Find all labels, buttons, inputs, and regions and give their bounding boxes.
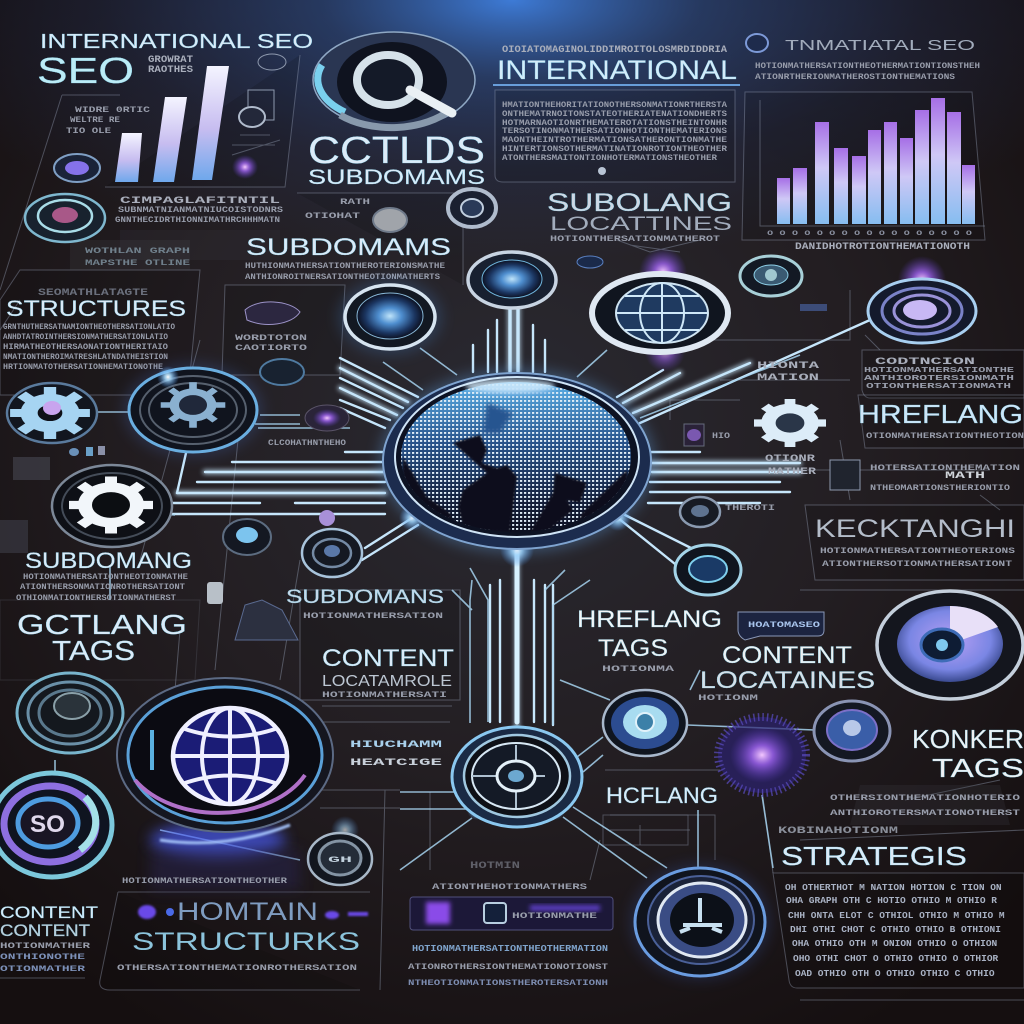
text block: heading lines: [38, 196, 283, 299]
node: small left: [223, 519, 271, 555]
gear node: left blue: [7, 383, 97, 443]
heading: gctlang tags: [17, 609, 187, 666]
central globe: [379, 369, 655, 553]
heading: hiuchamm: HEATCIGE: [350, 758, 442, 769]
heading: hreflang right: OTIONMATHERSATIONTHEOTION: [866, 432, 1024, 441]
heading: structures: NMATIONTHEROIMATRESHLATNDATHEISTION: [3, 353, 168, 362]
text block: right upper: HIONTA: [757, 361, 819, 372]
chip: hoatomaseo: HOATOMASEO: [748, 621, 820, 630]
text block: strategis: OH OTHERTHOT M NATION HOTION C TION ON: [785, 882, 1002, 893]
heading: international seo small: HOTIONMATHERSATIONTHEOTHERMATIONTIONSTHEH: [755, 62, 980, 71]
heading: hreflang right: MATHER: [768, 467, 816, 478]
text block: centre bottom: NTHEOTIONMATIONSTHEROTERSATIONH: [408, 979, 608, 988]
heading: content locataines: HOTIONM: [698, 694, 758, 703]
heading: gctlang tags: GCTLANG: [17, 609, 187, 640]
heading: hiuchamm: HIUCHAMM: [350, 740, 442, 751]
heading: subolang locattines: LOCATTINES: [550, 214, 732, 235]
text block: subdomams: WORDTOTON: [235, 334, 307, 343]
text block: domain structurks: STRUCTURKS: [132, 928, 360, 956]
text block: content left: ONTHIONOTHE: [0, 953, 85, 962]
text block: heading lines: GNNTHECIDRTHIONNIMATHRCHHHMATN: [115, 216, 280, 225]
heading: keck tanghi: HOTIONMATHERSATIONTHEOTERIONS: [820, 547, 1015, 556]
heading: hiuchamm: [350, 740, 442, 769]
small text center-right: THEROTI: [725, 504, 775, 513]
heading: subdomang: SUBDOMANG: [25, 548, 192, 573]
heading: subdomang: ATIONTHERSONMATIONROTHERSATIONT: [20, 583, 185, 592]
left traces: [172, 452, 385, 514]
node: bottom small left: [308, 816, 372, 885]
text block: centre bottom: HOTIONMATHERSATIONTHEOTHERMATION: [412, 943, 608, 954]
heading: keck tanghi: [815, 515, 1015, 569]
small text center-right: HIO: [712, 432, 730, 441]
heading: content locataines: CONTENT: [722, 642, 852, 669]
heading: international: ATONTHERSMAITONTIONHOTERMATIONSTHEOTHER: [502, 154, 717, 163]
heading: international: OIOIATOMAGINOLIDDIMROITOLOSMRDIDDRIA: [502, 45, 727, 56]
heading: structures: HRTIONMATOTHERSATIONHEMATIONOTHE: [3, 363, 163, 372]
text block: heading lines: CIMPAGLAFITNTIL: [120, 196, 280, 207]
heading: international: TERSOTINONMATHERSATIONHOTIONTHEMATERIONS: [502, 127, 727, 136]
heading: structures: STRUCTURES: [6, 296, 186, 321]
text block: subdomams: SUBDOMAMS: [246, 234, 451, 261]
text block: domain structurks: [117, 850, 368, 973]
node: right lens: [814, 701, 890, 761]
heading: hreflang right: MATH: [945, 471, 985, 482]
heading: international: [497, 45, 737, 175]
text block: subdomams: ANTHIONROITNERSATIONTHEOTIONMATHERTS: [245, 273, 440, 282]
heading: subolang locattines: SUBOLANG: [547, 189, 732, 217]
text block: strategis: KOBINAHOTIONM: [778, 826, 898, 837]
heading: international: HINTERTIONSOTHERMATINATIONROTIONTHEOTHER: [502, 145, 727, 154]
upper-left diagonals: [340, 358, 418, 428]
small purple chip: CLCOHATHNTHEHO: [268, 439, 346, 448]
heading: keck tanghi: ATIONTHERSOTIONMATHERSATIONT: [822, 560, 1012, 569]
text block: heading lines: SUBNMATNIANMATNIUCOISTODNRS: [118, 206, 283, 215]
upper-right diagonals: [617, 320, 870, 423]
heading: content locatamrole: HOTIONMATHERSATI: [322, 691, 447, 700]
heading: subdomans centre: [286, 587, 444, 621]
heading: keck tanghi: KECKTANGHI: [815, 515, 1015, 543]
text block: domain structurks: HOMTAIN: [177, 898, 318, 926]
heading: hreflang right: NTHEOMARTIONSTHERIONTIO: [870, 484, 1010, 493]
node: top centre: [468, 252, 556, 308]
text block: strategis: CHH ONTA ELOT C OTHIOL OTHIO M OTHIO M: [788, 910, 1005, 921]
title: international seo: INTERNATIONAL SEO: [40, 31, 313, 53]
heading: konker tags: [912, 724, 1024, 783]
text block: strategis: ANTHIOROTERSMATIONOTHERST: [830, 809, 1020, 818]
heading: structures: ANHDTATROINTHERSIONMATHERSATIONLATIO: [3, 333, 168, 342]
text block: strategis: DHI OTHI CHOT C OTHIO OTHIO B OTHIONI: [790, 924, 1001, 935]
gear node: left large: [123, 363, 263, 457]
heading: content locatamrole: CONTENT: [322, 645, 454, 672]
bar chart: left: [115, 66, 229, 182]
text block: chart notes: RAOTHES: [148, 65, 193, 76]
heading: international seo small: TNMATIATAL SEO: [785, 37, 975, 54]
ring node: so: SO: [30, 811, 65, 838]
text block: right upper: HOTIONMATHERSATIONTHE: [864, 367, 1014, 375]
chip: hoatomaseo: [738, 612, 824, 640]
text block: centre bottom: HOTMIN: [470, 861, 520, 872]
icon: gear right: [754, 399, 826, 447]
bar chart: right: [760, 98, 985, 253]
heading: hcflang: [606, 783, 718, 845]
title: international seo: SEO: [37, 50, 134, 91]
heading: international: ONTHEMATRNOITONSTATEOTHERIATENATIONDHERTS: [502, 110, 727, 119]
text block: right upper: ANTHIOROTERSIONMATH: [864, 375, 1014, 383]
small purple node: [54, 154, 100, 182]
heading: international: MAONTHEINTROTHERMATIONSATHERONTIONMATHE: [502, 136, 727, 145]
text block: subdomams: HUTHIONMATHERSATIONTHEROTERIONSMATHE: [245, 262, 445, 271]
text block: right upper: OTIONTHERSATIONMATH: [866, 383, 1011, 391]
heading: subdomans centre: HOTIONMATHERSATION: [303, 612, 443, 621]
heading: subolang locattines: [547, 189, 732, 268]
small text center-right: [684, 424, 775, 513]
heading: hreflang right: [765, 399, 1024, 493]
text block: chart notes: WIDRE 0RTIC: [75, 106, 150, 115]
text block: strategis: OHA OTHIO OTH M ONION OTHIO O OTHION: [792, 938, 998, 949]
big globe node: [117, 678, 333, 858]
text block: content left: OTIONMATHER: [0, 965, 85, 974]
ring node: [25, 194, 105, 242]
text block: right upper: CODTNCION: [875, 357, 975, 368]
heading: subdomang: [16, 548, 192, 603]
magnifier node: [313, 32, 475, 128]
heading: konker tags: TAGS: [932, 753, 1024, 783]
node: purple right: [868, 256, 976, 343]
heading: content locataines: LOCATAINES: [700, 667, 875, 694]
heading: cctlds subdomains: SUBDOMAMS: [308, 166, 485, 189]
text block: subdomams: RATH: [340, 198, 370, 207]
ring node: lower left: [17, 673, 123, 753]
upper traces: [510, 300, 518, 372]
heading: hreflang tags: HREFLANG: [577, 606, 722, 633]
text block: centre bottom: ATIONTHEHOTIONMATHERS: [432, 883, 587, 892]
node: bottom small left: GH: [328, 856, 352, 865]
text block: subdomams: CAOTIORTO: [235, 344, 307, 353]
donut chart node: [877, 591, 1023, 699]
heading: subdomang: HOTIONMATHERSATIONTHEOTIONMATHE: [23, 573, 188, 582]
heading: content locatamrole: [322, 645, 454, 722]
text block: chart notes: [66, 54, 286, 179]
text block: centre bottom: HOTIONMATHE: [512, 912, 597, 921]
vertical trunk down from globe: [514, 552, 520, 722]
heading: konker tags: KONKER: [912, 724, 1024, 754]
right traces: [648, 452, 800, 503]
text block: strategis: OHA GRAPH OTH C HOTIO OTHIO M OTHIO R: [786, 895, 997, 906]
heading: content locatamrole: LOCATAMROLE: [322, 673, 452, 690]
node: subdomains blue: [338, 279, 442, 355]
text block: strategis: [778, 794, 1020, 979]
text block: subdomams: [235, 198, 451, 385]
dot-matrix continents: [400, 380, 632, 535]
node: right small: [740, 256, 802, 296]
heading: subdomang: OTHIONMATIONTHERSOTIONMATHERST: [16, 594, 176, 603]
title: international seo: [37, 31, 313, 91]
ring node: so: [0, 773, 112, 877]
node: right lower pair: [675, 497, 741, 595]
heading: international seo small: ATIONRTHERIONMATHEROSTIONTHEMATIONS: [755, 73, 955, 82]
heading: hreflang tags: HOTIONMA: [602, 665, 674, 674]
text block: right upper: [757, 357, 1014, 391]
heading: cctlds subdomains: CCTLDS: [308, 130, 485, 172]
purple glow dot: [718, 717, 806, 793]
heading: gctlang tags: TAGS: [52, 635, 135, 666]
heading: subdomans centre: SUBDOMANS: [286, 587, 444, 608]
heading: content locataines: [698, 642, 875, 703]
small node top centre: [373, 189, 496, 232]
node: bottom right: [630, 864, 770, 980]
text block: chart notes: TIO OLE: [66, 127, 111, 136]
heading: structures: GRNTHUTHERSATNAMIONTHEOTHERSATIONLATIO: [3, 323, 175, 332]
node: blue lens: [603, 690, 687, 756]
sketch details: [0, 230, 1010, 845]
text block: centre bottom: ATIONROTHERSIONTHEMATIONOTIONST: [408, 963, 608, 972]
small purple chip: [268, 405, 349, 448]
text block: content left: HOTIONMATHER: [0, 942, 90, 951]
heading: hreflang tags: [577, 606, 722, 674]
heading: hreflang right: HREFLANG: [858, 399, 1023, 429]
heading: structures: HIRMATHEOTHERSAONATIONTHERITAIO: [3, 343, 168, 352]
heading: hcflang: HCFLANG: [606, 783, 718, 808]
node: globe wireframe: [592, 248, 728, 372]
text block: subdomams: OTIOHAT: [305, 212, 360, 221]
text block: domain structurks: HOTIONMATHERSATIONTHEOTHER: [122, 877, 287, 886]
text block: strategis: STRATEGIS: [781, 841, 967, 871]
text block: content left: CONTENT: [0, 921, 90, 940]
heading: international seo small: [746, 34, 980, 82]
heading: hreflang tags: TAGS: [598, 635, 668, 662]
heading: subolang locattines: HOTIONTHERSATIONMATHEROT: [550, 235, 720, 244]
text block: heading lines: SEOMATHLATAGTE: [38, 288, 148, 299]
heading: international: INTERNATIONAL: [497, 55, 737, 85]
node glow points: [399, 505, 425, 531]
diagonal node links: [362, 515, 695, 568]
heading: hreflang right: HOTERSATIONTHEMATION: [870, 464, 1020, 473]
text block: centre bottom: [408, 861, 613, 988]
node: bottom centre target: [452, 727, 582, 827]
text block: content left: [0, 903, 98, 978]
text block: right upper: MATION: [757, 373, 819, 384]
text block: strategis: OAD OTHIO OTH O OTHIO OTHIO C OTHIO: [795, 968, 995, 979]
text block: strategis: OHO OTHI CHOT O OTHIO OTHIO O OTHIOR: [793, 953, 999, 964]
bar chart: right: DANIDHOTROTIONTHEMATIONOTH: [795, 242, 970, 253]
node: ring lower: [302, 510, 362, 577]
text block: heading lines: MAPSTHE OTLINE: [85, 259, 190, 268]
heading: structures: [3, 296, 186, 372]
text block: content left: CONTENT: [0, 903, 98, 922]
text block: chart notes: WELTRE RE: [70, 116, 120, 125]
heading: international: HMATIONTHEHORITATIONOTHERSONMATIONRTHERSTA: [502, 101, 727, 110]
heading: international: HOTMARNAOTIONRTHEMATEROTATIONSTHEINTONHR: [502, 119, 727, 128]
gear node: white: [52, 465, 172, 547]
heading: hreflang right: OTIONR: [765, 454, 815, 465]
connector lines: [52, 300, 870, 878]
text block: chart notes: GROWRAT: [148, 55, 193, 66]
text block: heading lines: WOTHLAN GRAPH: [85, 247, 190, 256]
text block: domain structurks: OTHERSATIONTHEMATIONROTHERSATION: [117, 964, 357, 973]
text block: strategis: OTHERSIONTHEMATIONHOTERIO: [830, 794, 1020, 803]
bar chart: right: o o o o o o o o o o o o o o o o o: [767, 229, 972, 238]
heading: cctlds subdomains: [308, 130, 485, 189]
